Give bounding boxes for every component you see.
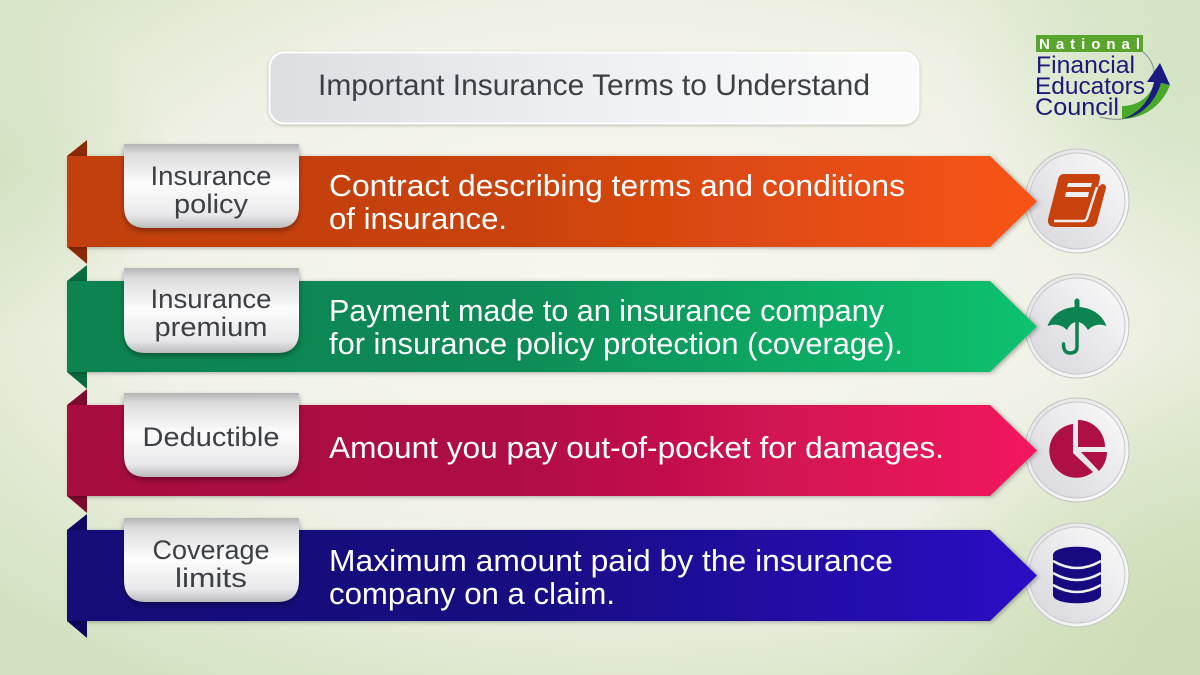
- term tab: insurance premium: Insurance: [150, 284, 272, 314]
- icon circle: umbrella: [1025, 274, 1129, 378]
- definition: deductible: Amount you pay out-of-pocket for damages.: [329, 430, 944, 465]
- definition: insurance policy: Contract describing terms and conditions: [329, 168, 905, 203]
- logo: National Financial Educators Council: Financial: [1036, 52, 1135, 79]
- ribbon arrow: insurance policy: [67, 156, 1037, 247]
- icon circle: pie chart: [1025, 398, 1129, 502]
- ribbon fold: insurance premium: [67, 265, 87, 389]
- ribbon fold: insurance policy: [67, 140, 87, 264]
- ribbon fold: deductible: [67, 389, 87, 513]
- definition: insurance policy: of insurance.: [329, 201, 507, 236]
- ribbon arrow: coverage limits: [67, 530, 1037, 621]
- term tab: insurance premium: premium: [154, 312, 268, 342]
- ribbon arrow: insurance premium: [67, 281, 1037, 372]
- definition: insurance premium: [329, 293, 903, 361]
- panel: deductible: [67, 389, 1129, 513]
- panel: insurance premium: [67, 265, 1129, 389]
- icon circle: book: [1025, 149, 1129, 253]
- term tab: deductible: Deductible: [142, 422, 280, 452]
- term tab: coverage limits: Coverage: [152, 535, 270, 565]
- panel: coverage limits: [67, 514, 1129, 638]
- ribbon arrow: deductible: [67, 405, 1037, 496]
- definition: insurance premium: Payment made to an insurance company: [329, 293, 884, 328]
- logo: National Financial Educators Council: National: [1039, 36, 1140, 53]
- term tab: coverage limits: [124, 518, 299, 602]
- logo: National Financial Educators Council: [1035, 35, 1170, 121]
- logo: National Financial Educators Council: Educators: [1035, 73, 1145, 100]
- term tab: coverage limits: limits: [175, 563, 247, 593]
- term tab: insurance policy: Insurance: [150, 161, 272, 191]
- definition: coverage limits: [329, 543, 893, 611]
- panel: insurance policy: [67, 140, 1129, 264]
- definition: insurance policy: [329, 168, 905, 236]
- logo: National Financial Educators Council: Council: [1035, 94, 1119, 121]
- term tab: insurance premium: [124, 268, 299, 353]
- title: Important Insurance Terms to Understand: [318, 69, 870, 102]
- definition: insurance premium: for insurance policy protection (coverage).: [329, 326, 903, 361]
- term tab: insurance policy: policy: [174, 189, 249, 219]
- title: [270, 52, 918, 124]
- icon circle: database: [1025, 523, 1129, 627]
- term tab: insurance policy: [124, 144, 299, 228]
- definition: coverage limits: company on a claim.: [329, 576, 615, 611]
- ribbon fold: coverage limits: [67, 514, 87, 638]
- definition: coverage limits: Maximum amount paid by the insurance: [329, 543, 893, 578]
- term tab: deductible: [124, 393, 299, 477]
